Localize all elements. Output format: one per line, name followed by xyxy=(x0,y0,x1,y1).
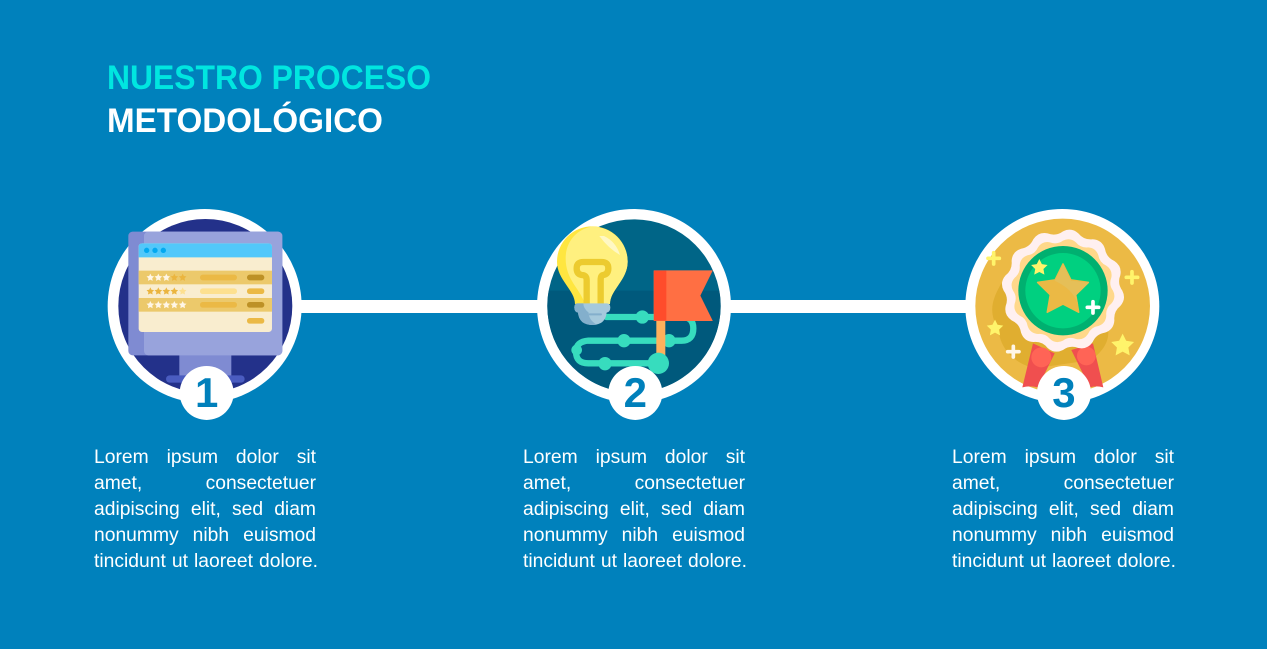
step 2 icon: light bulb and path to flag: 2 xyxy=(624,369,647,416)
connector line xyxy=(296,300,972,313)
title: METODOLÓGICO xyxy=(107,102,383,140)
text block: step 2: tincidunt ut laoreet dolore. xyxy=(523,551,747,572)
text block: step 1: nonummy nibh euismod xyxy=(94,525,316,546)
text block: step 3: nonummy nibh euismod xyxy=(952,525,1174,546)
text block: step 2: Lorem ipsum dolor sit xyxy=(523,447,745,468)
text block: step 1 xyxy=(94,447,318,572)
step 1 icon: monitor with ratings xyxy=(108,209,302,420)
text block: step 3: adipiscing elit, sed diam xyxy=(952,499,1174,520)
text block: step 2: amet, consectetuer xyxy=(523,473,745,494)
title xyxy=(107,59,431,140)
text block: step 1: amet, consectetuer xyxy=(94,473,316,494)
step 1 icon: monitor with ratings: 1 xyxy=(195,369,218,416)
text block: step 3: tincidunt ut laoreet dolore. xyxy=(952,551,1176,572)
text block: step 3 xyxy=(952,447,1176,572)
text block: step 2: adipiscing elit, sed diam xyxy=(523,499,745,520)
text block: step 3: amet, consectetuer xyxy=(952,473,1174,494)
text block: step 2 xyxy=(523,447,747,572)
text block: step 1: adipiscing elit, sed diam xyxy=(94,499,316,520)
text block: step 1: tincidunt ut laoreet dolore. xyxy=(94,551,318,572)
text block: step 3: Lorem ipsum dolor sit xyxy=(952,447,1174,468)
step 2 icon: light bulb and path to flag xyxy=(537,209,731,420)
text block: step 1: Lorem ipsum dolor sit xyxy=(94,447,316,468)
text block: step 2: nonummy nibh euismod xyxy=(523,525,745,546)
step 3 icon: medal with star: 3 xyxy=(1052,369,1076,416)
step 3 icon: medal with star xyxy=(965,209,1159,420)
title: NUESTRO PROCESO xyxy=(107,59,431,97)
